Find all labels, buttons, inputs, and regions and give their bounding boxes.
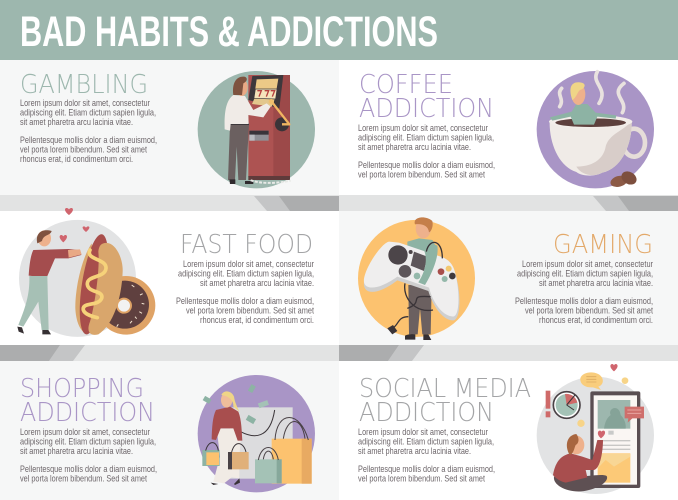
heading: coffee addiction: ADDICTION xyxy=(359,94,494,124)
text block: gambling: adipiscing elit. Etiam dictum sapien ligula, xyxy=(20,108,156,118)
text block: coffee addiction: Lorem ipsum dolor sit amet, consectetur xyxy=(358,123,488,134)
panel: social media addiction xyxy=(339,361,678,500)
text block: social media addiction: Pellentesque mollis dolor a diam euismod, xyxy=(358,464,495,475)
panel: fast food xyxy=(0,208,339,345)
heading: coffee addiction xyxy=(359,70,494,124)
text block: shopping addiction: sit amet pharetra arcu lacinia vitae. xyxy=(20,446,133,457)
text block: shopping addiction xyxy=(20,427,157,484)
text block: gambling xyxy=(20,98,157,165)
text block: fast food: vel porta lorem bibendum. Sed sit amet xyxy=(186,306,314,316)
heading: social media addiction: SOCIAL MEDIA xyxy=(359,374,531,404)
text block: social media addiction: adipiscing elit. Etiam dictum sapien ligula, xyxy=(358,436,494,448)
text block: shopping addiction: Lorem ipsum dolor sit amet, consectetur xyxy=(20,427,150,438)
heading: gambling: GAMBLING xyxy=(20,70,148,100)
panel: gaming xyxy=(339,211,678,345)
heading: shopping addiction xyxy=(20,374,155,428)
text block: social media addiction: vel porta lorem bibendum. Sed sit amet xyxy=(358,474,485,484)
icon: person using phone with social media xyxy=(537,364,654,494)
text block: coffee addiction: sit amet pharetra arcu lacinia vitae. xyxy=(358,142,471,153)
text block: fast food: Lorem ipsum dolor sit amet, consectetur xyxy=(183,259,314,270)
text block: coffee addiction: Pellentesque mollis dolor a diam euismod, xyxy=(358,160,495,171)
panel: gambling xyxy=(0,60,339,195)
text block: fast food: sit amet pharetra arcu lacinia vitae. xyxy=(200,278,314,289)
text block: gambling: sit amet pharetra arcu lacinia vitae. xyxy=(20,117,133,128)
heading: shopping addiction: ADDICTION xyxy=(20,398,155,428)
panel: coffee addiction xyxy=(339,60,678,195)
icon: man hugging hot dog and donut xyxy=(17,208,155,337)
title banner: BAD HABITS & ADDICTIONS xyxy=(20,8,438,56)
strip: second divider xyxy=(0,345,678,361)
heading: gaming: GAMING xyxy=(553,230,653,260)
text block: fast food xyxy=(176,259,314,326)
text block: social media addiction: sit amet pharetra arcu lacinia vitae. xyxy=(358,446,471,457)
text block: gambling: Lorem ipsum dolor sit amet, consectetur xyxy=(20,98,150,109)
text block: shopping addiction: adipiscing elit. Etiam dictum sapien ligula, xyxy=(20,436,156,448)
heading: social media addiction xyxy=(359,374,531,428)
text block: coffee addiction: vel porta lorem bibendum. Sed sit amet xyxy=(358,170,485,180)
text block: gambling: rhoncus erat, id condimentum orci. xyxy=(20,154,133,165)
icon: man holding game controller xyxy=(358,217,475,340)
text block: gambling: Pellentesque mollis dolor a diam euismod, xyxy=(20,135,157,146)
text block: shopping addiction: vel porta lorem bibendum. Sed sit amet xyxy=(20,474,147,484)
text block: social media addiction xyxy=(358,427,495,484)
text block: coffee addiction: adipiscing elit. Etiam dictum sapien ligula, xyxy=(358,132,494,144)
title banner xyxy=(0,0,678,60)
text block: gaming xyxy=(515,259,653,326)
icon: man in coffee cup xyxy=(537,71,654,189)
text block: social media addiction: Lorem ipsum dolor sit amet, consectetur xyxy=(358,427,488,438)
text block: coffee addiction xyxy=(358,123,495,180)
text block: gambling: vel porta lorem bibendum. Sed sit amet xyxy=(20,144,147,156)
strip: first divider xyxy=(0,195,678,211)
text block: shopping addiction: Pellentesque mollis dolor a diam euismod, xyxy=(20,464,157,475)
text block: fast food: Pellentesque mollis dolor a diam euismod, xyxy=(176,296,314,307)
icon: man at slot machine xyxy=(198,71,315,188)
heading: coffee addiction: COFFEE xyxy=(359,70,453,100)
icon: woman with shopping bags xyxy=(198,375,315,492)
text block: fast food: rhoncus erat, id condimentum orci. xyxy=(200,315,314,326)
text block: fast food: adipiscing elit. Etiam dictum sapien ligula, xyxy=(178,268,314,280)
heading: fast food: FAST FOOD xyxy=(180,230,313,260)
heading: shopping addiction: SHOPPING xyxy=(20,374,144,404)
heading: social media addiction: ADDICTION xyxy=(359,398,494,428)
panel: shopping addiction xyxy=(0,361,339,500)
